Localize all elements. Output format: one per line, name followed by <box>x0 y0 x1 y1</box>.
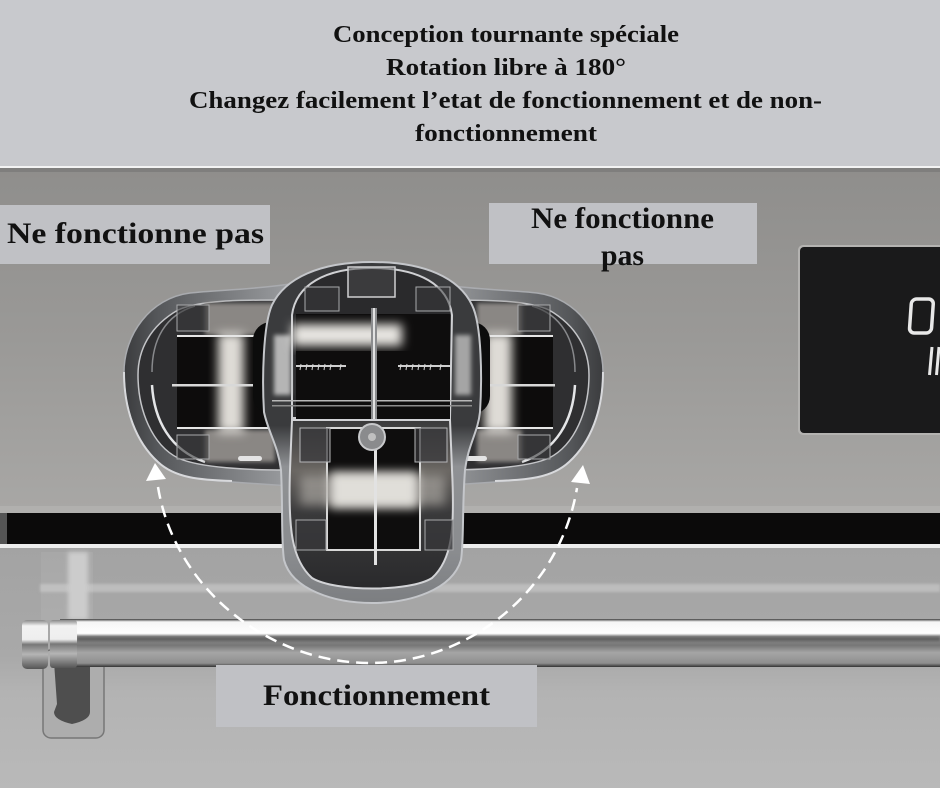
header panel <box>0 0 940 166</box>
black side knob <box>253 322 490 414</box>
right lobe <box>437 284 603 486</box>
side highlights <box>274 335 291 395</box>
oven background photo <box>0 168 940 788</box>
label: bottom: Fonctionnement <box>263 679 490 712</box>
lower window <box>290 420 453 588</box>
central body <box>263 262 481 603</box>
top clip <box>348 267 395 297</box>
label: bottom <box>216 665 537 727</box>
title text: Rotation libre à 180° <box>386 55 626 81</box>
label: left <box>0 205 270 264</box>
handle bracket <box>43 650 104 738</box>
label: right: Ne fonctionne <box>531 202 714 235</box>
label: right: pas <box>601 239 644 272</box>
oven handle <box>22 619 940 669</box>
label: left: Ne fonctionne pas <box>7 217 264 250</box>
title text <box>189 22 822 147</box>
left lobe <box>124 284 290 486</box>
oven display <box>798 245 940 435</box>
rotation arrow <box>146 463 590 663</box>
upper window <box>296 314 450 420</box>
title text: Conception tournante spéciale <box>333 22 679 48</box>
arrowhead left <box>146 463 166 481</box>
label: right <box>489 202 757 272</box>
rotating lock device <box>124 262 603 603</box>
arrowhead right <box>571 465 590 484</box>
title text: Changez facilement l’etat de fonctionnement et de non- <box>189 88 822 114</box>
title text: fonctionnement <box>415 121 597 147</box>
